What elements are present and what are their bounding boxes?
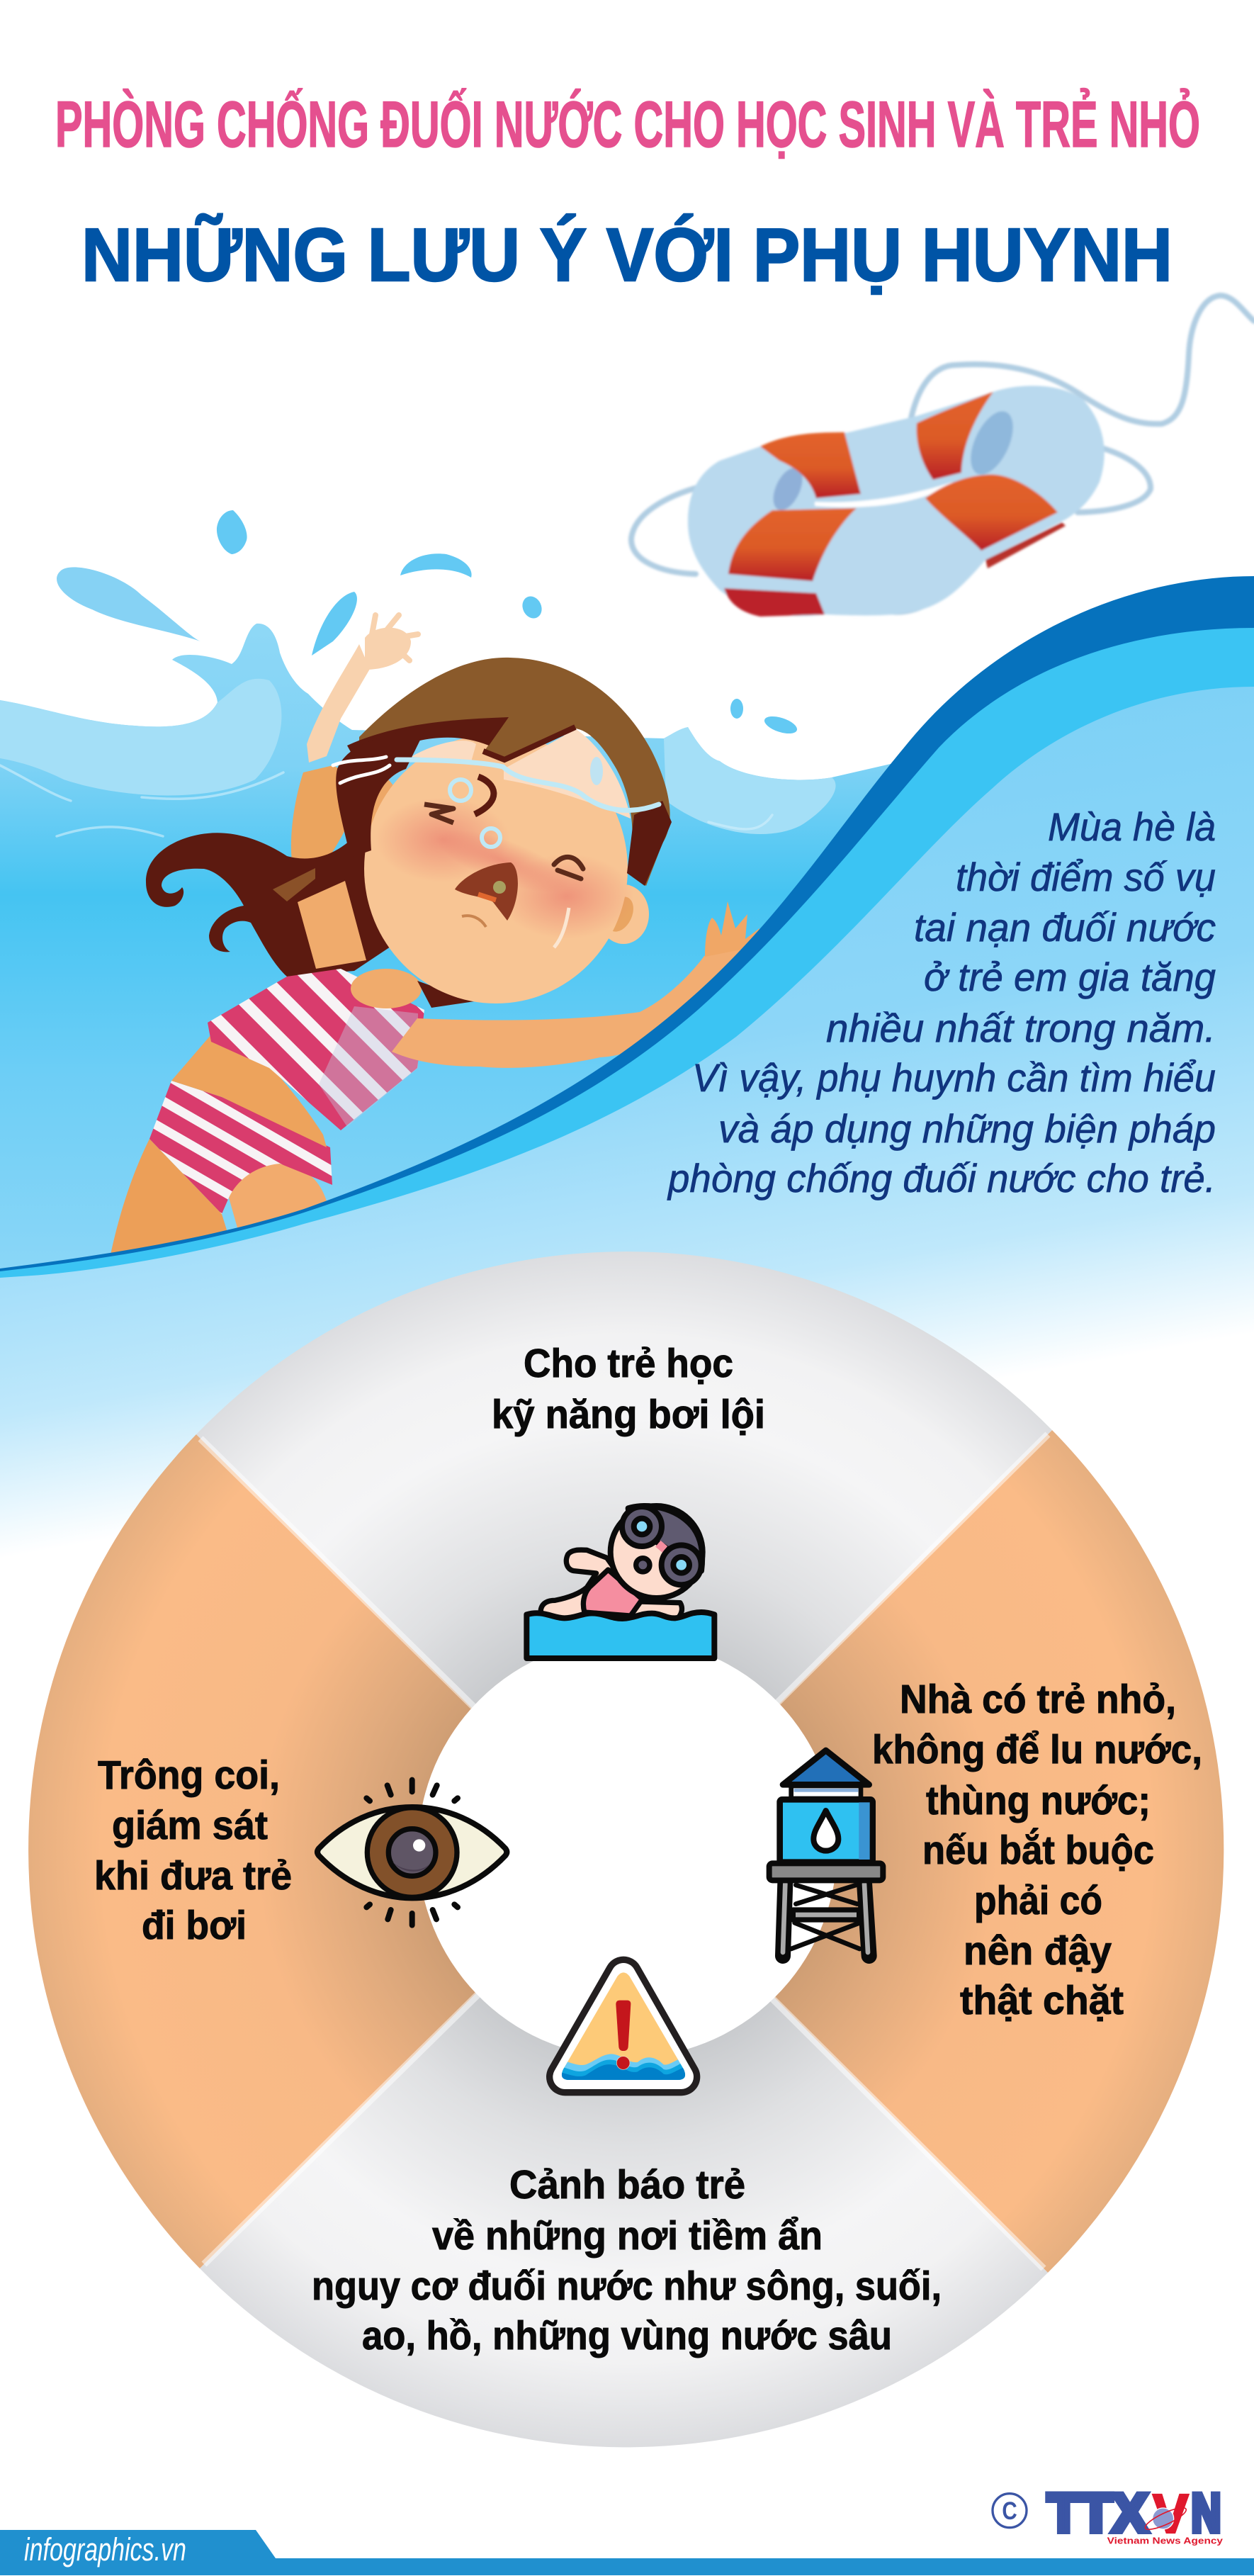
text block: summer drowning intro: ở trẻ em gia tăng <box>924 955 1216 999</box>
illustration: drowning girl <box>106 615 759 1276</box>
text: right tip: Nhà có trẻ nhỏ, <box>900 1677 1176 1722</box>
panel: curved wave bands <box>0 576 1254 1701</box>
text: bottom tip <box>312 2162 942 2358</box>
text: left tip: đi bơi <box>142 1903 247 1948</box>
footer: blue bar with site name <box>0 2530 1254 2575</box>
segment: bottom grey <box>200 1993 1048 2447</box>
text block: summer drowning intro: phòng chống đuối nước cho trẻ. <box>667 1156 1216 1200</box>
hair top <box>336 658 672 886</box>
icon: water warning sign <box>553 1972 689 2086</box>
text block: summer drowning intro <box>667 804 1216 1200</box>
text block: summer drowning intro: và áp dụng những biện pháp <box>718 1106 1216 1151</box>
text: left tip <box>94 1753 292 1948</box>
text: right tip: nên đậy <box>964 1928 1112 1974</box>
footer: blue bar with site name: infographics.vn <box>24 2531 186 2567</box>
panel: life ring with four tips <box>28 1252 1224 2447</box>
text block: summer drowning intro: Vì vậy, phụ huynh cần tìm hiểu <box>692 1055 1216 1100</box>
text: left tip: Trông coi, <box>98 1753 280 1798</box>
neck <box>351 969 422 1008</box>
text: top tip <box>492 1341 765 1437</box>
text: right tip: thùng nước; <box>926 1778 1151 1823</box>
illustration: life buoy with rope <box>631 296 1254 617</box>
text block: summer drowning intro: Mùa hè là <box>1048 804 1216 849</box>
raised arm <box>291 615 418 868</box>
logo: TTXVN Vietnam News Agency: N <box>1192 2483 1221 2543</box>
text: right tip: nếu bắt buộc <box>922 1827 1154 1873</box>
swimsuit top <box>208 969 424 1130</box>
extended arm <box>392 901 759 1068</box>
text block: summer drowning intro: nhiều nhất trong năm. <box>826 1006 1216 1050</box>
text: left tip: giám sát <box>112 1803 268 1848</box>
text: right tip <box>872 1677 1202 2023</box>
splash droplets <box>57 510 799 737</box>
icon: eye <box>317 1780 507 1925</box>
face <box>359 729 649 1003</box>
segment: left orange <box>28 1434 476 2268</box>
text: top tip: kỹ năng bơi lội <box>492 1392 765 1437</box>
logo: TTXVN Vietnam News Agency: TTX <box>1047 2483 1148 2543</box>
belly <box>171 1035 327 1147</box>
logo: TTXVN Vietnam News Agency: C <box>1002 2497 1017 2525</box>
text: right tip: thật chặt <box>960 1978 1124 2023</box>
icon: water tower <box>769 1750 883 1956</box>
logo: TTXVN Vietnam News Agency <box>993 2483 1224 2546</box>
water lines on head <box>333 757 659 847</box>
logo: TTXVN Vietnam News Agency: Vietnam News Agency <box>1107 2535 1224 2546</box>
text: right tip: không để lu nước, <box>872 1727 1202 1772</box>
icon: swimmer <box>526 1506 714 1658</box>
text: left tip: khi đưa trẻ <box>94 1853 292 1899</box>
text block: summer drowning intro: tai nạn đuối nước <box>914 905 1216 950</box>
text: top tip: Cho trẻ học <box>524 1341 733 1386</box>
segment: top grey <box>196 1252 1052 1708</box>
logo: TTXVN Vietnam News Agency: V <box>1153 2483 1189 2544</box>
segment: right orange <box>774 1430 1224 2273</box>
legs <box>106 1139 327 1276</box>
text: bottom tip: về những nơi tiềm ẩn <box>432 2213 823 2259</box>
shoulder <box>298 881 366 969</box>
subtitle: notes for parents: NHỮNG LƯU Ý VỚI PHỤ HUYNH <box>81 213 1173 297</box>
text: right tip: phải có <box>974 1878 1102 1923</box>
text block: summer drowning intro: thời điểm số vụ <box>956 855 1216 899</box>
text: bottom tip: nguy cơ đuối nước như sông, suối, <box>312 2263 942 2309</box>
illustration: water and splash <box>0 510 900 1276</box>
text: bottom tip: Cảnh báo trẻ <box>509 2162 745 2207</box>
swimsuit bottom <box>149 1081 332 1214</box>
hair tail <box>146 831 397 977</box>
text: bottom tip: ao, hồ, những vùng nước sâu <box>362 2313 892 2358</box>
